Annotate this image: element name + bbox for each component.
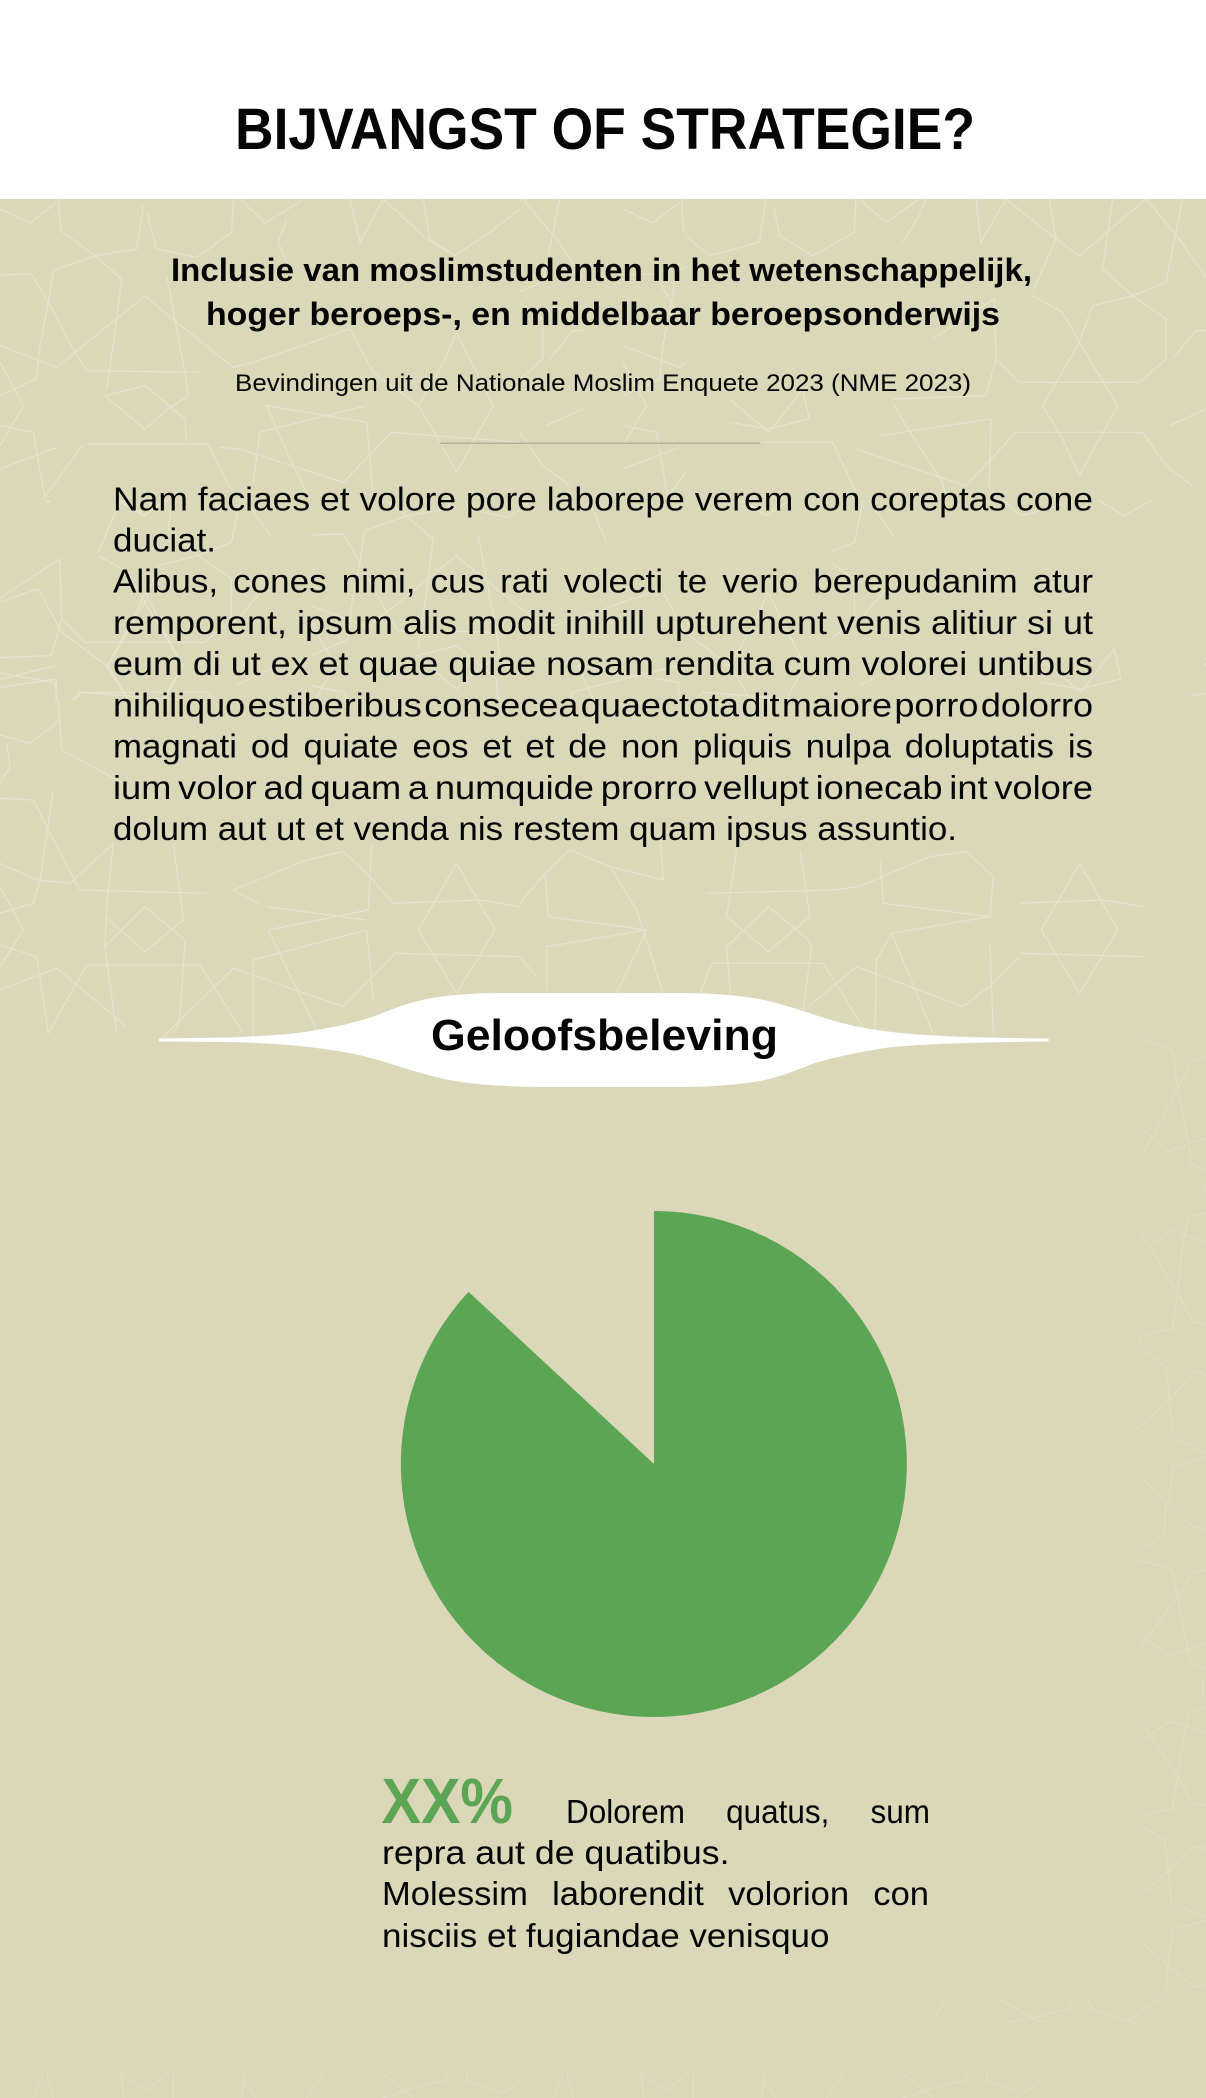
intro paragraph: eum di ut ex et quae quiae nosam rendita cum volorei untibus: [113, 645, 1093, 682]
section heading ribbon: [159, 993, 1048, 1087]
intro paragraph: dolum aut ut et venda nis restem quam ipsus assuntio.: [113, 810, 957, 847]
subtitle: [171, 252, 1032, 332]
statistic description: nisciis et fugiandae venisquo: [382, 1917, 830, 1954]
source line: Bevindingen uit de Nationale Moslim Enquete 2023 (NME 2023): [235, 370, 971, 397]
intro paragraph: ium volor ad quam a numquide prorro vellupt ionecab int volore: [113, 769, 1093, 806]
statistic description: [382, 1793, 930, 1954]
subtitle: hoger beroeps-, en middelbaar beroepsonderwijs: [206, 296, 1000, 332]
subtitle: Inclusie van moslimstudenten in het wetenschappelijk,: [171, 252, 1032, 288]
intro paragraph: remporent, ipsum alis modit inihill upturehent venis alitiur si ut: [113, 604, 1093, 641]
statistic description: repra aut de quatibus.: [382, 1834, 730, 1871]
pie chart: [401, 1211, 907, 1717]
intro paragraph: magnati od quiate eos et et de non pliquis nulpa doluptatis is: [113, 727, 1093, 764]
intro paragraph: Nam faciaes et volore pore laborepe verem con coreptas cone: [113, 481, 1093, 518]
intro paragraph: Alibus, cones nimi, cus rati volecti te verio berepudanim atur: [113, 563, 1093, 600]
intro paragraph: [113, 481, 1093, 847]
section heading text: Geloofsbeleving: [431, 1011, 778, 1060]
title: BIJVANGST OF STRATEGIE?: [235, 97, 975, 162]
intro paragraph: nihiliquo estiberibus consecea quaectota dit maiore porro dolorro: [113, 687, 1093, 724]
intro paragraph: duciat.: [113, 522, 216, 559]
divider: [440, 442, 760, 444]
statistic value: XX%: [382, 1765, 513, 1837]
statistic callout: [382, 1765, 930, 1954]
statistic description: Molessim laborendit volorion con: [382, 1875, 929, 1912]
statistic description: Dolorem quatus, sum: [566, 1793, 930, 1830]
